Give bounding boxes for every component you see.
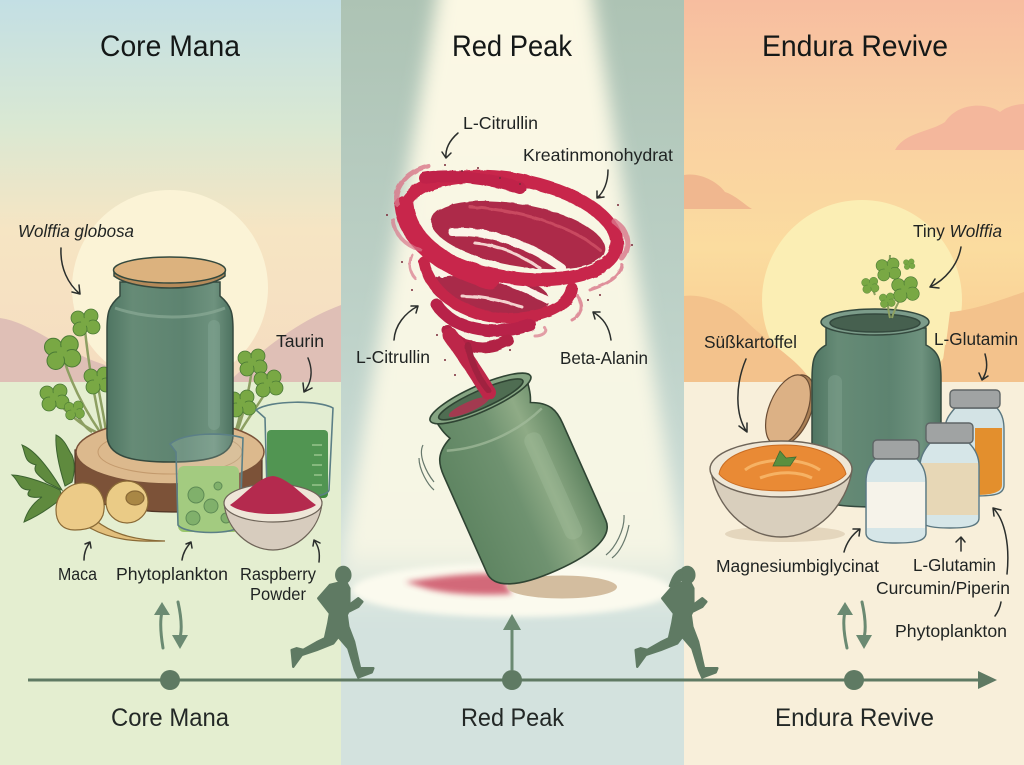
label: Core Mana: Core Mana <box>111 704 229 732</box>
orange bottle <box>945 390 1004 496</box>
runner right <box>636 567 717 677</box>
beige bottle <box>920 423 979 528</box>
label: Beta-Alanin <box>560 312 648 368</box>
label: Curcumin/Piperin: Curcumin/Piperin <box>876 578 1010 598</box>
arrow: Red Peak <box>503 614 521 670</box>
jar <box>107 257 233 462</box>
label: Raspberry Powder: Powder <box>250 584 306 604</box>
title: Endura Revive <box>762 30 948 63</box>
plant leaves <box>40 309 283 420</box>
label: Magnesiumbiglycinat: Magnesiumbiglycinat <box>716 556 879 576</box>
label: Kreatinmonohydrat <box>523 145 673 198</box>
label: L-Glutamin lower: L-Glutamin <box>913 555 996 575</box>
label: L-Glutamin upper <box>934 329 1018 380</box>
tilted jar <box>416 360 616 597</box>
maca leaves <box>12 435 74 522</box>
label: Taurin <box>276 331 324 392</box>
label: Phytoplankton lower: Phytoplankton <box>895 621 1007 641</box>
label: Phytoplankton lower <box>895 602 1007 641</box>
label: Maca: Maca <box>58 564 97 584</box>
panel: Endura Revive <box>684 0 1024 765</box>
taurin beaker <box>256 402 333 498</box>
label: Raspberry Powder: Raspberry <box>240 564 316 584</box>
sun <box>762 200 962 400</box>
label: Red Peak: Red Peak <box>461 704 564 732</box>
clouds <box>895 104 1024 150</box>
label: Taurin: Taurin <box>276 331 324 351</box>
tornado top ring <box>395 161 625 295</box>
sweet potato bowl <box>710 441 852 542</box>
label: Phytoplankton: Phytoplankton <box>116 564 228 584</box>
title: Red Peak <box>452 30 573 63</box>
jar <box>812 309 941 507</box>
motion lines <box>419 445 629 558</box>
label: L-Citrullin left <box>356 306 430 367</box>
label: L-Glutamin lower <box>913 537 996 575</box>
label: Maca <box>58 542 97 584</box>
jar shadow <box>507 576 617 598</box>
label: Süßkartoffel <box>704 332 797 432</box>
label: Tiny Wolffia: Tiny Wolffia <box>913 221 1002 241</box>
wooden stump <box>75 420 264 512</box>
label: Raspberry Powder <box>240 540 320 604</box>
label: L-Glutamin upper: L-Glutamin <box>934 329 1018 349</box>
label: L-Citrullin top <box>442 113 538 158</box>
ground <box>0 382 342 765</box>
background sky <box>0 0 342 383</box>
phytoplankton beaker <box>170 434 243 532</box>
hills <box>684 292 1024 383</box>
label: Kreatinmonohydrat: Kreatinmonohydrat <box>523 145 673 165</box>
label: L-Citrullin left: L-Citrullin <box>356 347 430 367</box>
timeline axis <box>28 671 997 689</box>
spotlight floor <box>352 563 672 617</box>
label: Wolffia globosa <box>18 221 134 294</box>
label: Wolffia globosa: Wolffia globosa <box>18 221 134 241</box>
arrows: Core Mana <box>154 602 188 649</box>
hills <box>0 305 341 383</box>
marker: Red Peak <box>502 670 522 690</box>
maca roots <box>56 481 165 541</box>
runner left <box>292 567 373 677</box>
powder particles <box>386 164 633 376</box>
spilled powder <box>405 574 512 595</box>
label: L-Citrullin top: L-Citrullin <box>463 113 538 133</box>
label: Magnesiumbiglycinat <box>716 529 879 576</box>
powder tornado <box>393 161 627 392</box>
arrows: Endura Revive <box>837 602 872 649</box>
label: Beta-Alanin: Beta-Alanin <box>560 348 648 368</box>
tornado funnel and lower rings <box>424 262 572 392</box>
panel: Red Peak <box>325 0 700 765</box>
background sky <box>684 0 1024 383</box>
ground <box>684 382 1024 765</box>
marker: Core Mana <box>160 670 180 690</box>
marker: Endura Revive <box>844 670 864 690</box>
raspberry powder bowl <box>224 476 322 550</box>
label: Tiny Wolffia <box>913 221 1002 288</box>
background <box>341 0 684 765</box>
timeline <box>28 567 997 732</box>
sun <box>72 190 268 386</box>
label: Phytoplankton <box>116 542 228 584</box>
tornado wisps <box>393 166 627 336</box>
label: Süßkartoffel: Süßkartoffel <box>704 332 797 352</box>
panel: Core Mana <box>0 0 342 765</box>
label: Curcumin/Piperin <box>876 508 1010 598</box>
plant stems <box>55 330 268 432</box>
tiny wolffia sprouts <box>862 255 919 318</box>
wooden lid <box>757 369 823 451</box>
label: Endura Revive: Endura Revive <box>775 704 934 732</box>
title: Core Mana <box>100 30 240 63</box>
tornado interior <box>426 189 610 323</box>
white bottle <box>866 440 926 543</box>
